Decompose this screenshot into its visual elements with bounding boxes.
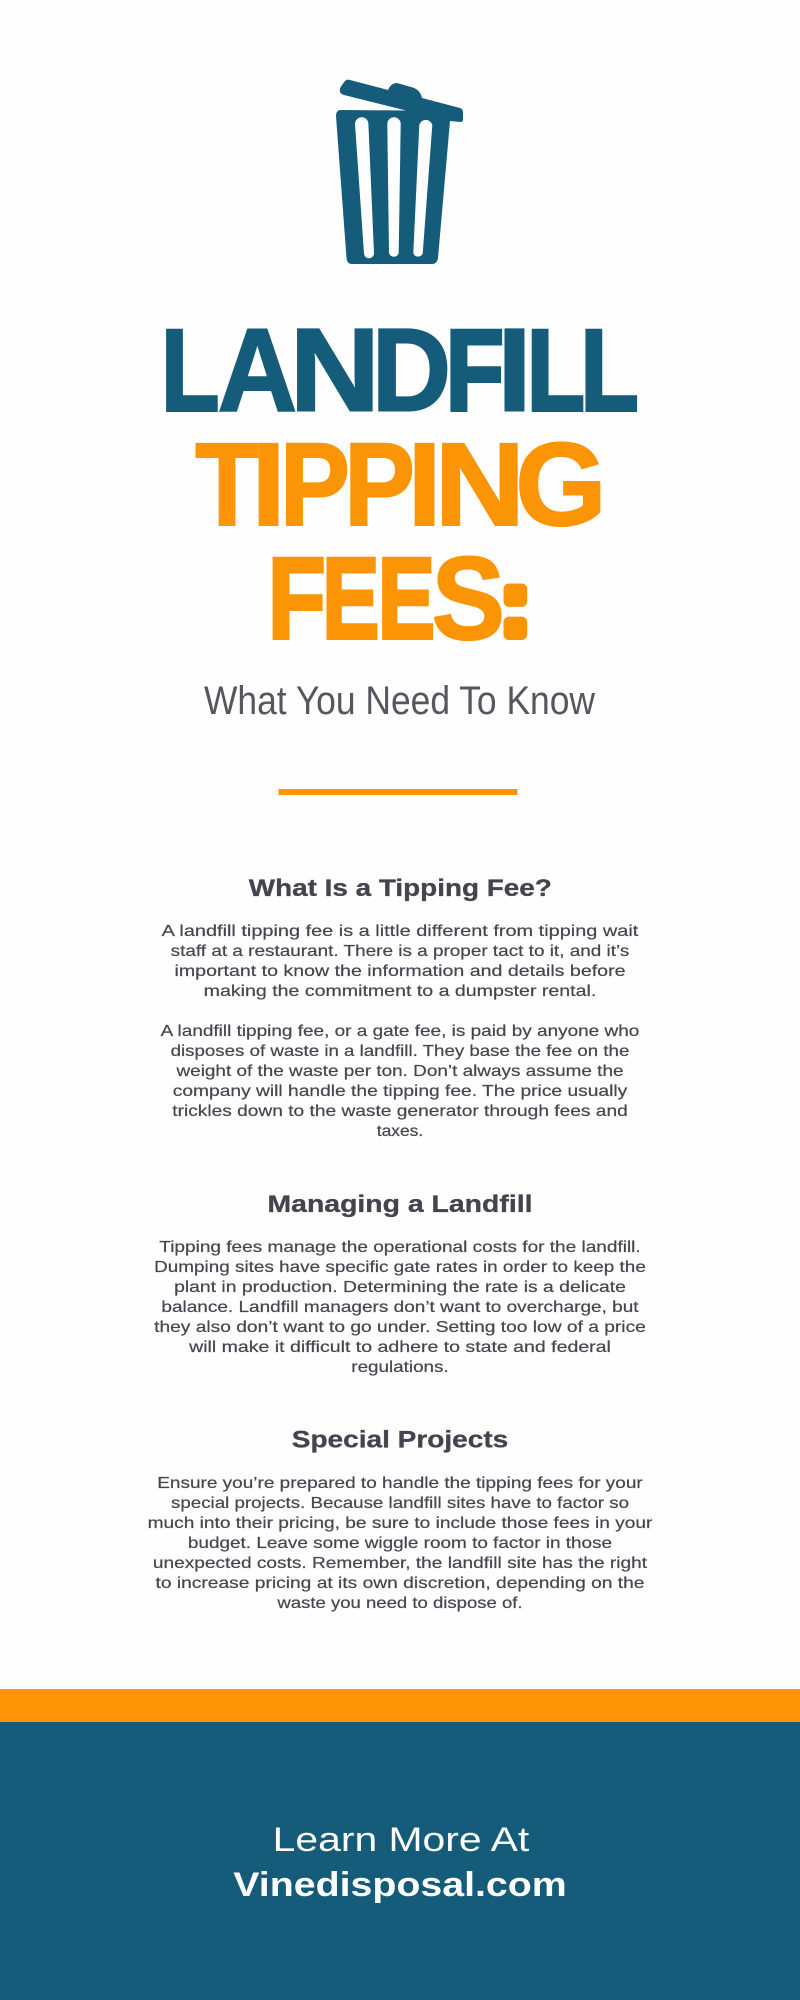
title line: fees: : [500,554,530,654]
title [161,303,638,665]
title line: tipping: P [344,418,415,550]
title line: tipping: I [408,418,442,550]
text block: tipping fee intro: making the commitment to a dumpster rental. [204,983,596,1000]
text block: special projects: much into their pricing, be sure to include those fees in your [148,1515,652,1532]
title line: landfill: I [497,303,532,436]
title line: landfill: L [161,307,219,435]
call to action: learn more at: Learn More At [273,1821,530,1859]
title line: tipping: I [252,418,286,550]
title line: landfill: L [581,307,638,435]
text block: tipping fee intro: staff at a restaurant. There is a proper tact to it, and it’s [171,943,629,960]
text block: who pays the tipping fee: company will handle the tipping fee. The price usually [173,1083,627,1100]
text block: special projects: special projects. Because landfill sites have to factor so [171,1495,629,1512]
text block: managing a landfill: they also don’t want to go under. Setting too low of a price [154,1319,646,1336]
title line: landfill: L [527,307,585,435]
text block: managing a landfill [154,1239,646,1376]
text block: who pays the tipping fee [161,1023,640,1140]
title line: tipping: T [195,418,259,550]
title line: tipping: P [280,418,350,550]
title line: tipping: G [515,419,607,550]
title line: landfill: D [372,305,451,437]
call to action: website: Vinedisposal.com [233,1866,567,1904]
footer panel [0,1722,800,2000]
section: special projects [148,1426,652,1612]
text block: who pays the tipping fee: A landfill tipping fee, or a gate fee, is paid by anyone who [161,1023,640,1040]
section: what is a tipping fee [161,875,640,1140]
title line: fees: S [432,533,505,665]
title line: tipping: N [435,418,525,550]
title line: fees [268,533,530,665]
divider [278,789,518,795]
title line: landfill: F [446,306,504,435]
heading: special projects: Special Projects [292,1426,508,1454]
title line: fees: F [268,535,326,663]
text block: tipping fee intro: A landfill tipping fee is a little different from tipping wait [162,923,639,940]
text block: tipping fee intro: important to know the information and details before [174,963,626,980]
text block: who pays the tipping fee: trickles down to the waste generator through fees and [172,1103,628,1120]
text block: managing a landfill: balance. Landfill managers don’t want to overcharge, but [161,1299,639,1316]
heading: what is a tipping fee: What Is a Tipping Fee? [249,875,552,902]
text block: special projects: Ensure you’re prepared to handle the tipping fees for your [157,1475,643,1492]
title line: fees: E [378,535,435,663]
title line: tipping [195,418,607,550]
text block: special projects: unexpected costs. Remember, the landfill site has the right [153,1555,648,1572]
subtitle: What You Need To Know [204,679,595,723]
title line: landfill: N [290,304,380,436]
text block: special projects [148,1475,652,1612]
title line: landfill: A [218,305,297,437]
section: managing a landfill [154,1191,646,1376]
text block: who pays the tipping fee: disposes of waste in a landfill. They base the fee on the [171,1043,630,1060]
text block: managing a landfill: will make it difficult to adhere to state and federal [188,1339,611,1356]
title line: fees: E [322,535,379,663]
text block: special projects: waste you need to dispose of. [276,1595,523,1612]
footer accent band [0,1689,800,1722]
text block: managing a landfill: regulations. [351,1359,449,1376]
text block: managing a landfill: Dumping sites have specific gate rates in order to keep the [154,1259,646,1276]
text block: managing a landfill: Tipping fees manage the operational costs for the landfill. [159,1239,641,1256]
icon: trash can [336,80,463,264]
heading: managing a landfill: Managing a Landfill [268,1191,532,1218]
text block: who pays the tipping fee: taxes. [377,1123,423,1140]
text block: managing a landfill: plant in production. Determining the rate is a delicate [174,1279,626,1296]
text block: tipping fee intro [162,923,639,1000]
text block: special projects: budget. Leave some wiggle room to factor in those [188,1535,612,1552]
title line: landfill [161,303,638,437]
text block: special projects: to increase pricing at its own discretion, depending on the [156,1575,645,1592]
text block: who pays the tipping fee: weight of the waste per ton. Don’t always assume the [175,1063,624,1080]
